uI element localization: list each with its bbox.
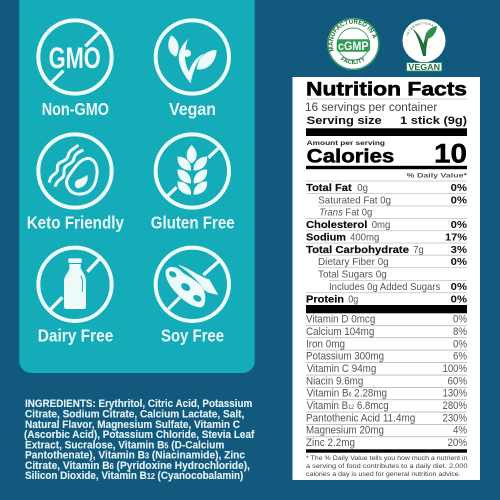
label: Vegan: Vegan — [169, 99, 216, 119]
badge: cGMP — [327, 18, 380, 70]
ingredients text block — [24, 398, 255, 482]
macronutrient table: 0mg — [372, 219, 390, 231]
footnote: calories a day is used for general nutrition advice. — [306, 471, 461, 478]
vitamins and minerals table: Zinc 2.2mg — [306, 437, 355, 449]
badge: cGMP: MANUFACTURED IN A — [328, 19, 377, 52]
vitamins and minerals table: 60% — [448, 375, 467, 387]
icon: keto friendly — [38, 134, 112, 208]
ingredients text block: Extract, Sucralose, Vitamin B5 (D-Calcium — [25, 439, 224, 451]
macronutrient table: Includes 0g Added Sugars — [329, 281, 440, 293]
macronutrient table: Cholesterol — [306, 220, 368, 231]
footnote: * The % Daily Value tells you how much a nutrient in — [306, 455, 468, 462]
macronutrient table: Dietary Fiber 0g — [318, 256, 389, 268]
macronutrient table: Sodium — [306, 232, 346, 244]
vitamins and minerals table: 4% — [453, 425, 467, 437]
macronutrient table: 0% — [451, 281, 468, 293]
icon: non-GMO: GMO — [49, 42, 101, 75]
vitamins and minerals table: 100% — [442, 363, 467, 375]
vitamins and minerals table: Niacin 9.6mg — [306, 375, 363, 387]
badge: vegan certification: INTERNATIONAL — [406, 22, 436, 36]
calories block: 10 — [434, 139, 467, 169]
servings block: 16 servings per container — [305, 102, 437, 114]
vitamins and minerals table: 0% — [453, 314, 467, 326]
vitamins and minerals table: Vitamin B6 2.28mg — [307, 388, 387, 400]
macronutrient table: 0% — [451, 194, 468, 206]
macronutrient table: 0% — [451, 219, 468, 231]
ingredients text block: Silicon Dioxide, Vitamin B12 (Cyanocobalamin) — [25, 470, 244, 482]
vitamins and minerals table: 6% — [453, 351, 467, 363]
footnote — [306, 455, 468, 478]
vitamins and minerals table: Potassium 300mg — [306, 351, 384, 363]
vitamins and minerals table: Vitamin C 94mg — [307, 363, 376, 375]
vitamins and minerals table: Calcium 104mg — [306, 326, 374, 338]
vitamins and minerals table: 0% — [453, 338, 467, 350]
macronutrient table: Total Carbohydrate — [306, 245, 409, 256]
icon: gluten free — [156, 134, 229, 208]
ingredients text block: INGREDIENTS: Erythritol, Citric Acid, Potassium — [25, 398, 252, 410]
macronutrient table: 0% — [451, 256, 468, 268]
vitamins and minerals table: Vitamin B12 6.8mcg — [307, 400, 389, 412]
panel: dietary badges — [19, 0, 255, 373]
vitamins and minerals table: 8% — [453, 326, 467, 338]
macronutrient table — [306, 181, 468, 313]
label: Keto Friendly: Keto Friendly — [27, 212, 124, 232]
macronutrient table: Protein — [306, 294, 344, 306]
macronutrient table: 0% — [451, 182, 468, 194]
vitamins and minerals table: 280% — [442, 400, 467, 412]
calories block: % Daily Value* — [407, 172, 467, 179]
ingredients text block: Natural Flavor, Magnesium Sulfate, Vitamin C — [25, 419, 240, 431]
label: Gluten Free: Gluten Free — [151, 212, 235, 232]
badge: cGMP: cGMP — [338, 39, 368, 53]
macronutrient table: 0g — [348, 294, 358, 306]
ingredients text block: Pantothenate), Vitamin B3 (Niacinamide), Zinc — [25, 450, 245, 462]
label: Non-GMO: Non-GMO — [42, 99, 109, 119]
icon: non-GMO — [38, 20, 112, 94]
servings block: Serving size — [307, 115, 382, 127]
icon: vegan — [156, 20, 229, 94]
label: Soy Free: Soy Free — [161, 326, 224, 346]
vitamins and minerals table: Vitamin D 0mcg — [306, 314, 375, 326]
macronutrient table: 7g — [413, 244, 424, 256]
macronutrient table: 3% — [451, 244, 468, 256]
macronutrient table: Trans Fat 0g — [319, 206, 372, 218]
label: Dairy Free: Dairy Free — [38, 326, 114, 346]
servings block — [305, 99, 467, 136]
vitamins and minerals table: 130% — [442, 388, 467, 400]
macronutrient table: Total Fat — [306, 183, 352, 194]
macronutrient table: 400mg — [350, 232, 379, 244]
calories block: Calories — [307, 147, 394, 168]
badge: cGMP: FACILITY — [340, 56, 364, 64]
ingredients text block: Citrate, Sodium Citrate, Calcium Lactate, Salt, — [25, 408, 244, 420]
vitamins and minerals table: Iron 0mg — [306, 338, 345, 350]
macronutrient table: Saturated Fat 0g — [318, 194, 391, 206]
badge: vegan certification — [402, 19, 446, 72]
macronutrient table: Total Sugars 0g — [318, 268, 387, 280]
vitamins and minerals table: Pantothenic Acid 11.4mg — [306, 412, 415, 424]
vitamins and minerals table — [306, 314, 467, 453]
panel: nutrition facts — [292, 77, 480, 480]
heading: Nutrition Facts: Nutrition Facts — [306, 78, 467, 100]
ingredients text block: Citrate, Vitamin B6 (Pyridoxine Hydrochloride), — [25, 460, 250, 472]
macronutrient table: 0g — [357, 182, 368, 194]
servings block: 1 stick (9g) — [400, 115, 467, 127]
vitamins and minerals table: 20% — [448, 437, 467, 449]
icon: soy free — [156, 248, 229, 321]
vitamins and minerals table: 230% — [442, 412, 467, 424]
footnote: a serving of food contributes to a daily diet. 2,000 — [306, 463, 468, 470]
badge: vegan certification: VEGAN — [408, 63, 440, 72]
ingredients text block: (Ascorbic Acid), Potassium Chloride, Stevia Leaf — [24, 429, 255, 441]
macronutrient table: 0% — [451, 294, 468, 306]
calories block: Amount per serving — [307, 140, 385, 147]
macronutrient table: 17% — [445, 232, 468, 244]
vitamins and minerals table: Magnesium 20mg — [306, 425, 384, 437]
icon: dairy free — [38, 248, 112, 321]
calories block — [306, 139, 467, 179]
